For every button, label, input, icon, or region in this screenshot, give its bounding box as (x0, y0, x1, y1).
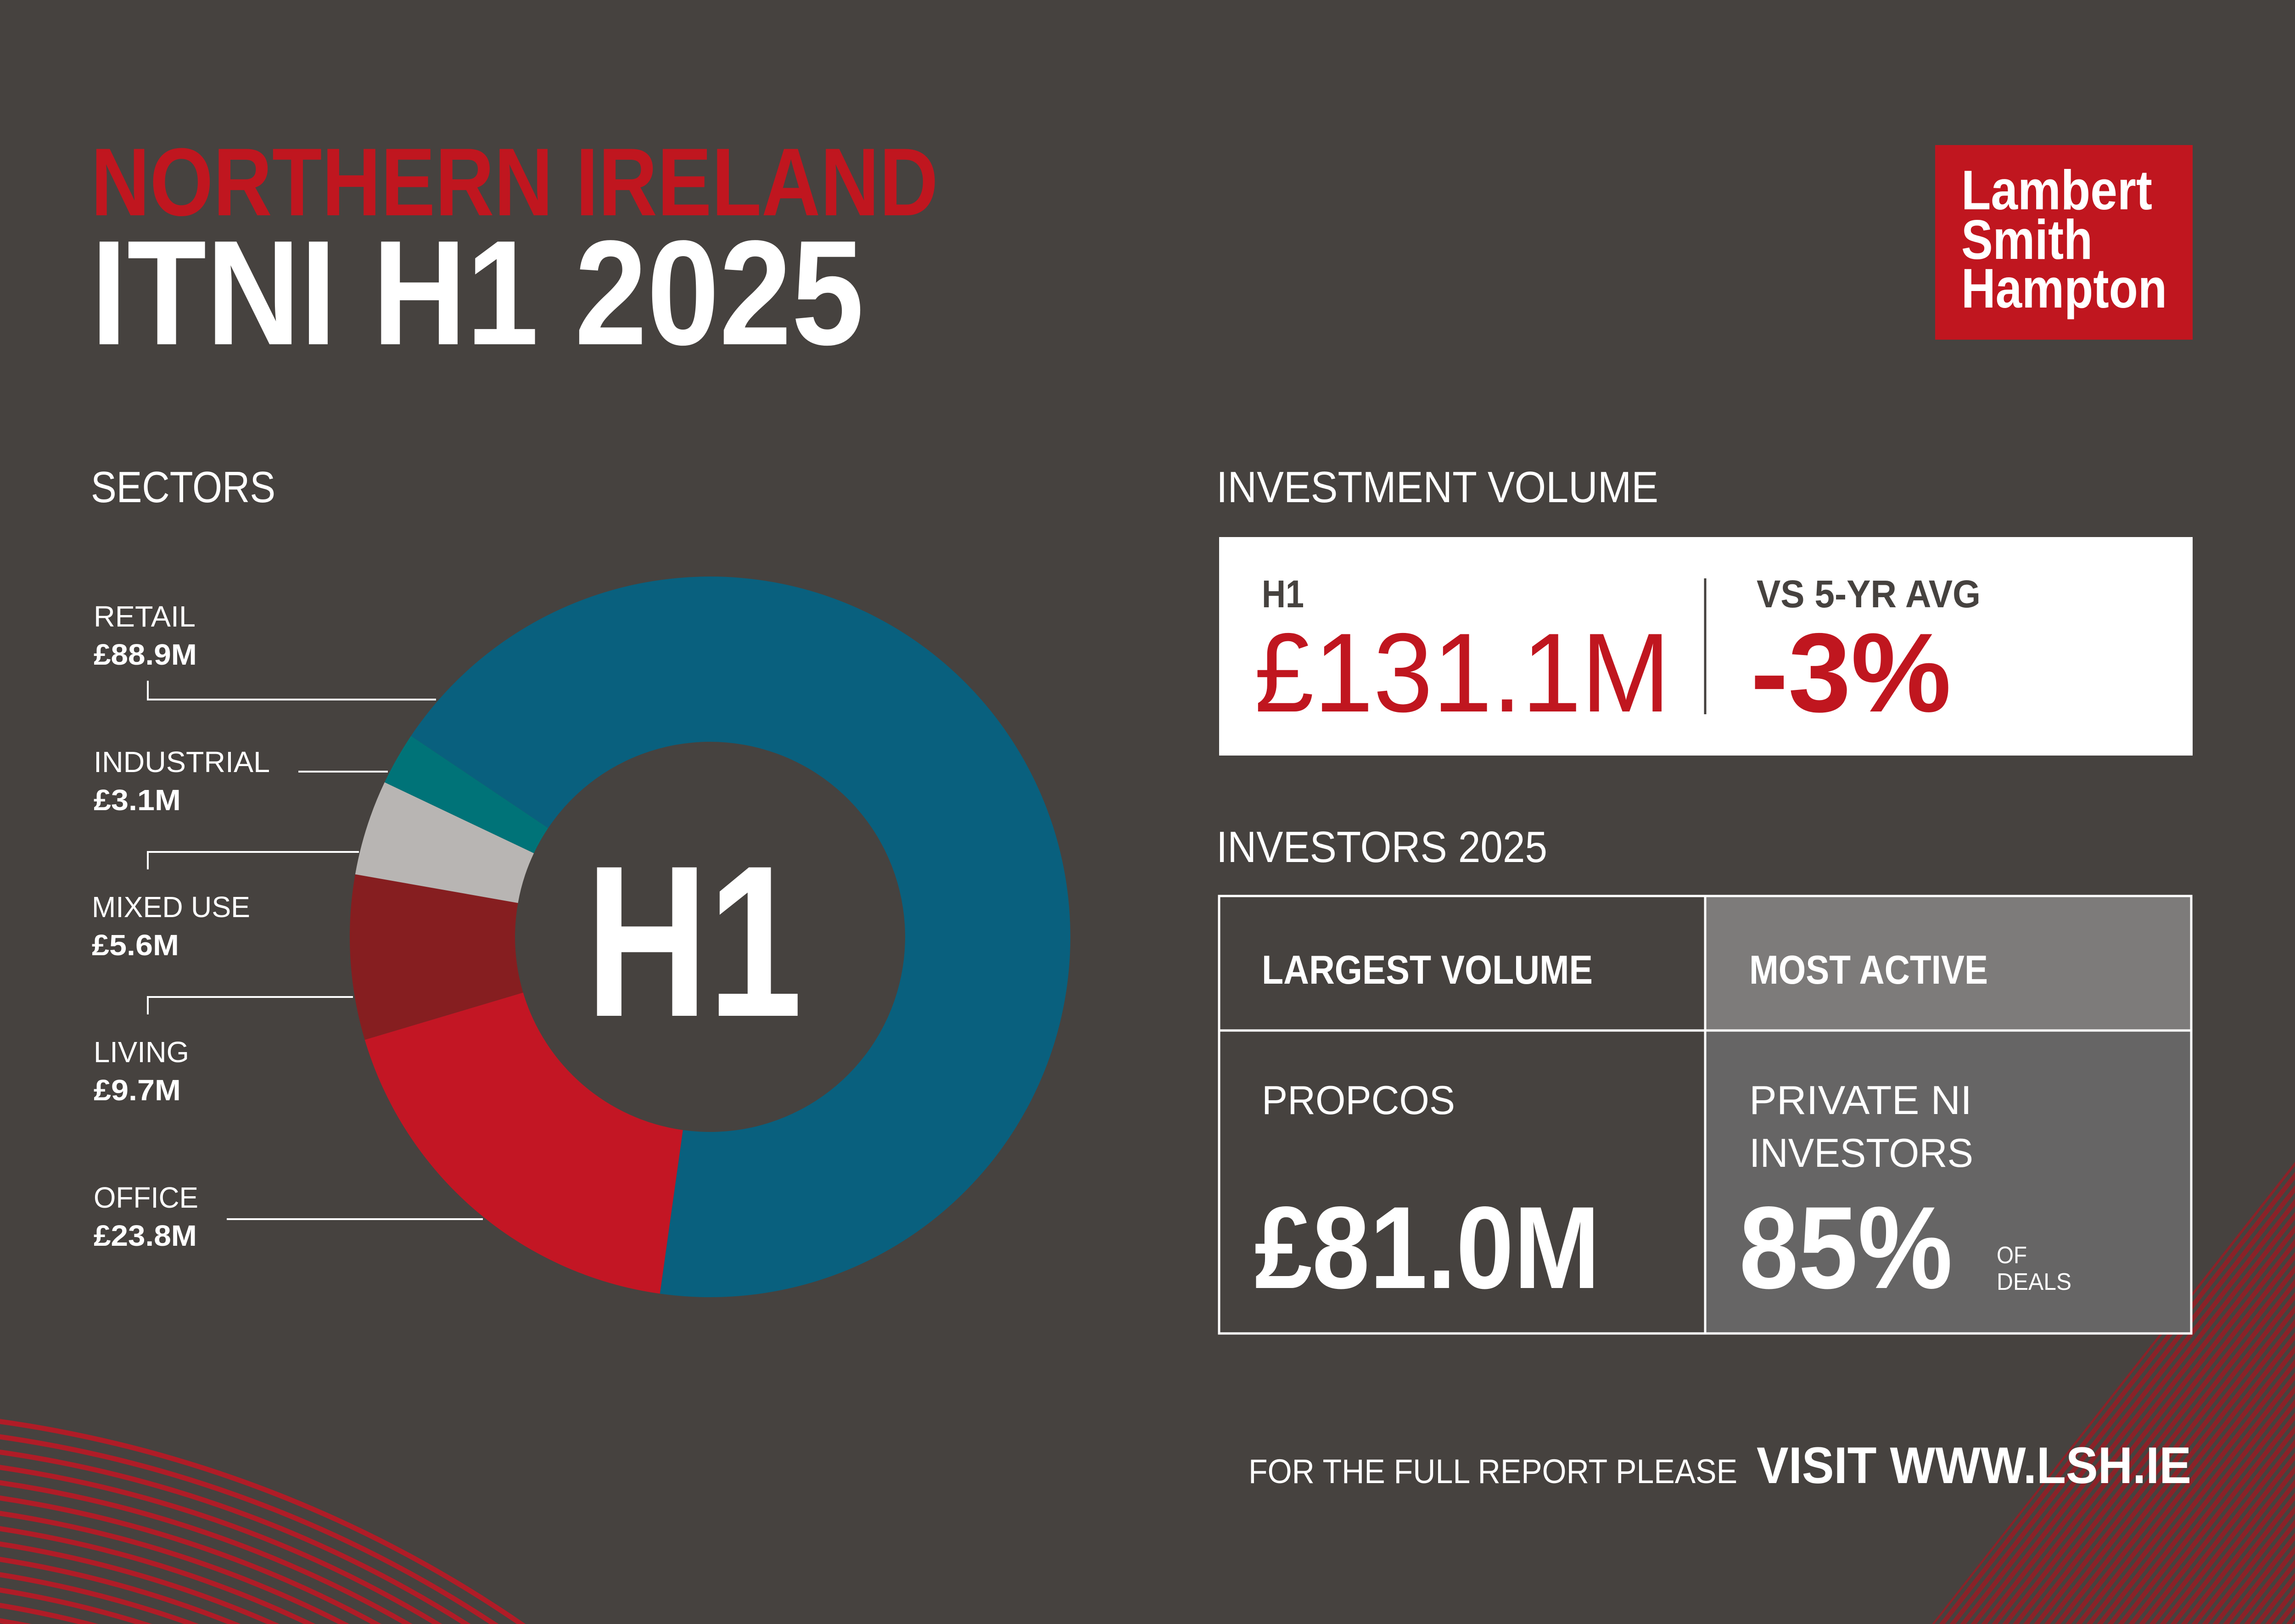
title: Northern Ireland: NORTHERN IRELAND (91, 128, 938, 236)
heading: investors 2025: INVESTORS 2025 (1216, 823, 1547, 872)
logo: Lambert Smith Hampton (1935, 145, 2193, 340)
panel: investment volume: -3% (1751, 610, 1951, 735)
footer: call to action (1248, 1437, 2191, 1494)
panel: investment volume: £131.1M (1254, 610, 1670, 735)
largest volume: £81.0M (1254, 1182, 1600, 1313)
label: mixed use: MIXED USE (92, 890, 250, 924)
title: ITNI H1 2025: ITNI H1 2025 (91, 209, 864, 376)
most active: DEALS (1997, 1269, 2071, 1295)
largest volume (1254, 947, 1600, 1313)
label: living: LIVING (94, 1036, 189, 1069)
panel: investment volume: VS 5-YR AVG (1757, 572, 1981, 616)
most active: INVESTORS (1749, 1130, 1973, 1176)
panel: investors table (1219, 896, 2191, 1333)
label: retail (94, 600, 436, 700)
label: living: £9.7M (94, 1074, 181, 1107)
most active: OF (1997, 1242, 2027, 1269)
label: office: OFFICE (94, 1181, 198, 1214)
panel: investment volume (1219, 537, 2193, 756)
donut centre label: H1 (586, 821, 802, 1062)
panel: investment volume: H1 (1262, 572, 1304, 616)
label: office (94, 1181, 483, 1252)
segment: industrial (385, 736, 548, 853)
label: industrial (94, 745, 388, 817)
segment: retail (411, 577, 1070, 1297)
most active: MOST ACTIVE (1749, 947, 1988, 992)
heading: sectors: SECTORS (91, 463, 275, 512)
logo: Lambert Smith Hampton: Smith (1961, 208, 2093, 271)
label: mixed use (92, 852, 359, 962)
largest volume: LARGEST VOLUME (1262, 947, 1593, 992)
most active (1739, 947, 2071, 1313)
label: living (94, 997, 353, 1107)
heading: investment volume: INVESTMENT VOLUME (1216, 463, 1658, 512)
most active: 85% (1739, 1182, 1953, 1313)
label: industrial: £3.1M (94, 784, 181, 817)
logo: Lambert Smith Hampton: Hampton (1961, 257, 2167, 319)
label: retail: RETAIL (94, 600, 196, 633)
most active: PRIVATE NI (1749, 1077, 1972, 1123)
segment: office (365, 992, 683, 1294)
segment: living (350, 874, 523, 1040)
segment: mixed use (355, 782, 534, 903)
decoration: bottom-right stripes (1932, 1162, 2295, 1624)
label: retail: £88.9M (94, 638, 197, 671)
footer: call to action: VISIT WWW.LSH.IE (1757, 1437, 2191, 1494)
label: industrial: INDUSTRIAL (94, 745, 270, 778)
logo: Lambert Smith Hampton: Lambert (1961, 159, 2152, 221)
decoration: bottom-left arcs (0, 1410, 1051, 1624)
label: mixed use: £5.6M (92, 929, 179, 962)
largest volume: PROPCOS (1262, 1077, 1455, 1123)
label: office: £23.8M (94, 1219, 197, 1252)
footer: call to action: FOR THE FULL REPORT PLEASE (1248, 1452, 1737, 1490)
donut chart: sectors (350, 577, 1070, 1297)
